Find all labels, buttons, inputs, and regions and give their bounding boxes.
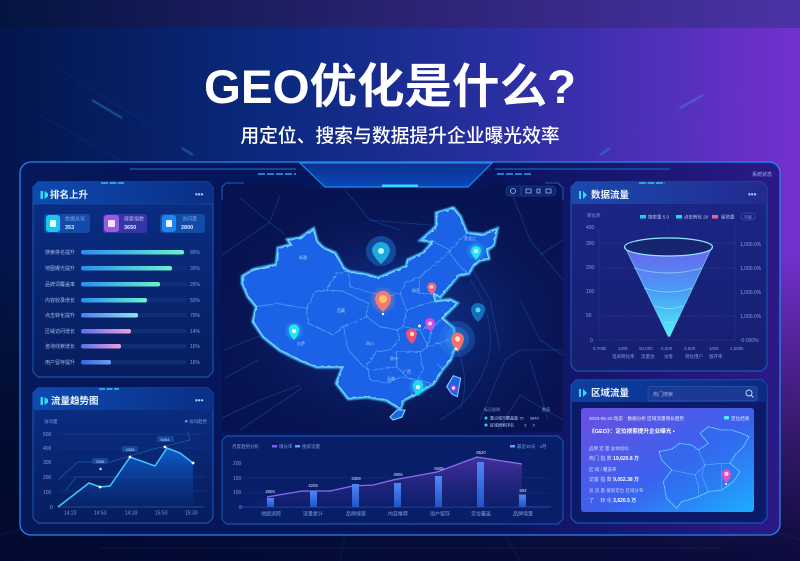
- map legend: 数值: [542, 406, 550, 412]
- combo chart: traffic bars and line: 4906: [393, 472, 403, 477]
- panel heading: 区域流量: [591, 387, 630, 399]
- panel heading: •••: [195, 396, 204, 405]
- map: Taiwan: [447, 376, 461, 397]
- card: region info: 2023-05-20 动态 数据分析 区域流量增长趋势: [589, 415, 684, 422]
- map labels: [297, 235, 476, 381]
- funnel legend: 转化率: [587, 212, 601, 219]
- map labels: 新疆: [299, 254, 307, 260]
- map: Hainan: [390, 410, 405, 420]
- bar chart: rankings: [45, 249, 201, 366]
- bar chart: rankings: 用户留存提升: [45, 359, 75, 366]
- map labels: 贵州: [390, 355, 398, 361]
- combo chart: traffic bars and line: 品牌增量: [513, 510, 533, 518]
- combo chart: traffic bars and line: 693: [520, 488, 527, 493]
- pin: magenta: [418, 318, 435, 331]
- combo chart: traffic bars and line: 流量累计: [303, 510, 323, 518]
- bar chart: rankings: 搜索排名提升: [45, 249, 75, 256]
- combo chart: traffic bars and line: 5506: [434, 466, 444, 471]
- funnel chart: 1,000.0%: [740, 290, 762, 296]
- combo chart: traffic bars and line: [233, 450, 551, 518]
- bar chart: rankings: 16%: [190, 360, 201, 366]
- chart legend: 月度趋势分析: [232, 443, 259, 450]
- area chart: traffic: [43, 418, 207, 516]
- pin: sea marker: [471, 303, 485, 322]
- area chart: traffic: 14:33: [125, 510, 138, 516]
- combo chart: traffic bars and line: 100: [233, 490, 242, 496]
- pin: regional: [722, 470, 731, 485]
- funnel chart: 100k: [709, 346, 720, 351]
- pin: central: [406, 329, 417, 344]
- stat card 3: 2800: [181, 225, 193, 231]
- area chart: traffic: 100: [43, 490, 52, 496]
- map legend: 重点城市覆盖量 75 3846: [490, 414, 539, 420]
- combo chart: traffic bars and line: 0: [239, 505, 242, 511]
- area chart: traffic: 5264: [161, 437, 170, 442]
- bar chart: rankings: 14%: [190, 329, 201, 335]
- combo chart: traffic bars and line: 品牌搜索: [346, 510, 366, 518]
- funnel chart: 0: [590, 338, 593, 344]
- road network: [222, 188, 563, 430]
- panel: ranking: [33, 182, 213, 377]
- panel: data funnel: [571, 182, 767, 371]
- funnel chart: 留存率: [709, 353, 723, 360]
- funnel chart: 转化用户: [685, 353, 703, 360]
- funnel legend: 留资量: [721, 214, 735, 220]
- stat card 1: [44, 214, 90, 233]
- card: region info: 《GEO》：定位搜索提升企业曝光 ▪: [589, 427, 675, 435]
- map: regional: [659, 427, 749, 508]
- panel heading: [40, 189, 204, 201]
- bar chart: rankings: 89%: [190, 250, 201, 256]
- funnel chart: 3,500: [684, 346, 696, 351]
- funnel chart: 1,000.0%: [740, 242, 762, 248]
- title: GEO优化是什么?: [204, 61, 576, 114]
- funnel chart: [586, 225, 762, 360]
- funnel chart: 200: [586, 265, 595, 271]
- funnel chart: 5,000: [661, 346, 673, 351]
- area chart: traffic: 300: [43, 460, 52, 466]
- funnel legend: 搜索量 5.0: [648, 214, 670, 220]
- pin: large orange: [369, 286, 397, 315]
- funnel chart: 50,000: [639, 346, 653, 351]
- panel heading: [579, 387, 630, 399]
- bar chart: rankings: 内容收录增长: [45, 297, 75, 304]
- chart legend: 最近30天 · 4月: [517, 443, 547, 450]
- combo chart: traffic bars and line: 200: [233, 461, 242, 467]
- stat card 3: [160, 214, 205, 233]
- funnel chart: 100k: [618, 346, 629, 351]
- funnel chart: 1,000.0%: [740, 266, 762, 272]
- stat card 3: 访问量: [182, 216, 197, 222]
- bar chart: rankings: 26%: [190, 282, 201, 288]
- card: region info: 品牌 定 量 总体指标: [589, 445, 629, 452]
- funnel chart: 1,500k: [730, 346, 744, 351]
- bar chart: rankings: 点击转化提升: [45, 312, 75, 319]
- funnel chart: 流量池: [641, 353, 655, 360]
- area chart: traffic: 200: [43, 475, 52, 481]
- panel heading: 流量趋势图: [51, 395, 99, 407]
- combo chart: traffic bars and line: 用户留存: [430, 510, 450, 518]
- map labels: 黑龙江: [464, 235, 476, 241]
- map labels: 西藏: [337, 307, 345, 313]
- stat card 1: 数据总览: [65, 216, 85, 222]
- bar chart: rankings: 咨询线索增长: [45, 343, 75, 350]
- map: China: [243, 208, 497, 408]
- funnel chart: 电商转化率: [612, 353, 635, 360]
- combo chart: traffic bars and line: 内容推荐: [388, 510, 408, 518]
- funnel chart: 50: [586, 313, 592, 319]
- bar chart: rankings: 70%: [190, 313, 201, 319]
- pin: halo northwest: [366, 236, 396, 266]
- area chart: traffic: 14:23: [64, 510, 77, 516]
- card: region info: 总 流 量 搜索定位 区域分布: [589, 487, 644, 494]
- map toolbar: [506, 186, 556, 196]
- funnel chart: 400: [586, 225, 595, 231]
- card: region info: [581, 408, 754, 512]
- bar chart: rankings: 50%: [190, 298, 201, 304]
- search box: [648, 386, 757, 401]
- pin: east halo: [439, 321, 475, 357]
- funnel legend: 点击转化 20: [684, 214, 709, 220]
- bar chart: rankings: 品牌词覆盖率: [45, 281, 75, 288]
- pin: Guangdong: [408, 377, 428, 397]
- map labels: 四川: [366, 341, 374, 346]
- area chart: traffic: 15:53: [155, 510, 168, 516]
- card: region info: 定位结果: [731, 415, 750, 422]
- panel heading: •••: [748, 190, 757, 199]
- card: region info: 区 域 / 覆盖率: [589, 466, 617, 473]
- funnel chart: 300: [586, 241, 595, 247]
- map legend: [484, 406, 550, 428]
- chart legend: 增长率: [279, 443, 293, 450]
- stat card 2: 搜索指数: [124, 216, 144, 222]
- area chart: traffic: 3256: [96, 459, 105, 464]
- pin: Taiwan: [450, 384, 457, 392]
- chart legend: 搜索流量: [302, 443, 320, 450]
- bar chart: rankings: 16%: [190, 344, 201, 350]
- area chart: traffic: 访问趋势: [189, 418, 207, 425]
- bar chart: rankings: 区域访问增长: [45, 328, 75, 335]
- funnel chart: -0.000%: [740, 338, 759, 344]
- area chart: traffic: 15:30: [185, 510, 198, 516]
- map labels: 拉萨: [297, 340, 305, 346]
- area chart: traffic: 400: [43, 446, 52, 452]
- card: region info: 热门 指 数 19,620.8 万: [589, 455, 639, 462]
- funnel chart: 100: [586, 289, 595, 295]
- stat card 2: 3650: [124, 225, 136, 231]
- combo chart: traffic bars and line: 6520: [476, 450, 486, 455]
- pin: northeast: [466, 241, 486, 261]
- map labels: 云南: [387, 375, 395, 381]
- funnel legend: [587, 212, 755, 220]
- combo chart: traffic bars and line: 150: [233, 476, 242, 482]
- pin: Tibet: [284, 321, 304, 341]
- stat card 2: [103, 214, 147, 233]
- combo chart: traffic bars and line: 定位覆盖: [471, 510, 491, 518]
- panel heading: 排名上升: [50, 189, 89, 201]
- area chart: traffic: 0: [50, 505, 53, 511]
- card: region info: 访客 指 数 9,052.38 万: [589, 476, 639, 483]
- panel: center map: [210, 183, 580, 450]
- area chart: traffic: 访问量: [44, 418, 58, 425]
- panel: traffic trend: [33, 388, 213, 523]
- subtitle: 用定位、搜索与数据提升企业曝光效率: [240, 125, 560, 146]
- panel: regional traffic: [571, 380, 767, 523]
- map labels: 广西: [403, 368, 411, 374]
- card: region info: 了 转 化 3,620.5 万: [589, 497, 636, 504]
- map legend: 标记说明: [484, 406, 500, 412]
- dashboard frame: 系统状态: [752, 171, 772, 178]
- panel heading: [40, 395, 204, 407]
- area chart: traffic: 500: [43, 432, 52, 438]
- search box: 热门搜索: [653, 391, 673, 398]
- panel heading: •••: [195, 190, 204, 199]
- funnel chart: 1,000.0%: [740, 314, 762, 320]
- dashboard frame: [20, 162, 780, 535]
- panel heading: [579, 189, 757, 201]
- map labels: 陕西: [412, 287, 420, 293]
- combo chart: traffic bars and line: 4209: [308, 483, 318, 488]
- funnel chart: 8,700k: [593, 346, 607, 351]
- pin: Beijing: [427, 282, 436, 295]
- panel: bottom combo chart: [222, 436, 563, 524]
- combo chart: traffic bars and line: 3309: [351, 476, 361, 481]
- stat card 1: 353: [65, 225, 74, 231]
- funnel legend: 月度: [744, 214, 752, 220]
- area chart: traffic: 14:53: [94, 510, 107, 516]
- combo chart: traffic bars and line: 2609: [265, 489, 275, 494]
- bar chart: rankings: 地图曝光提升: [45, 265, 75, 272]
- panel heading: 数据流量: [591, 189, 630, 201]
- chart legend: [232, 443, 547, 450]
- map legend: 区域搜索排名 2 2: [490, 422, 536, 428]
- bar chart: rankings: 30%: [190, 266, 201, 272]
- area chart: traffic: 4335: [126, 447, 135, 452]
- combo chart: traffic bars and line: 地面追踪: [261, 510, 281, 518]
- funnel chart: 访客: [664, 353, 673, 360]
